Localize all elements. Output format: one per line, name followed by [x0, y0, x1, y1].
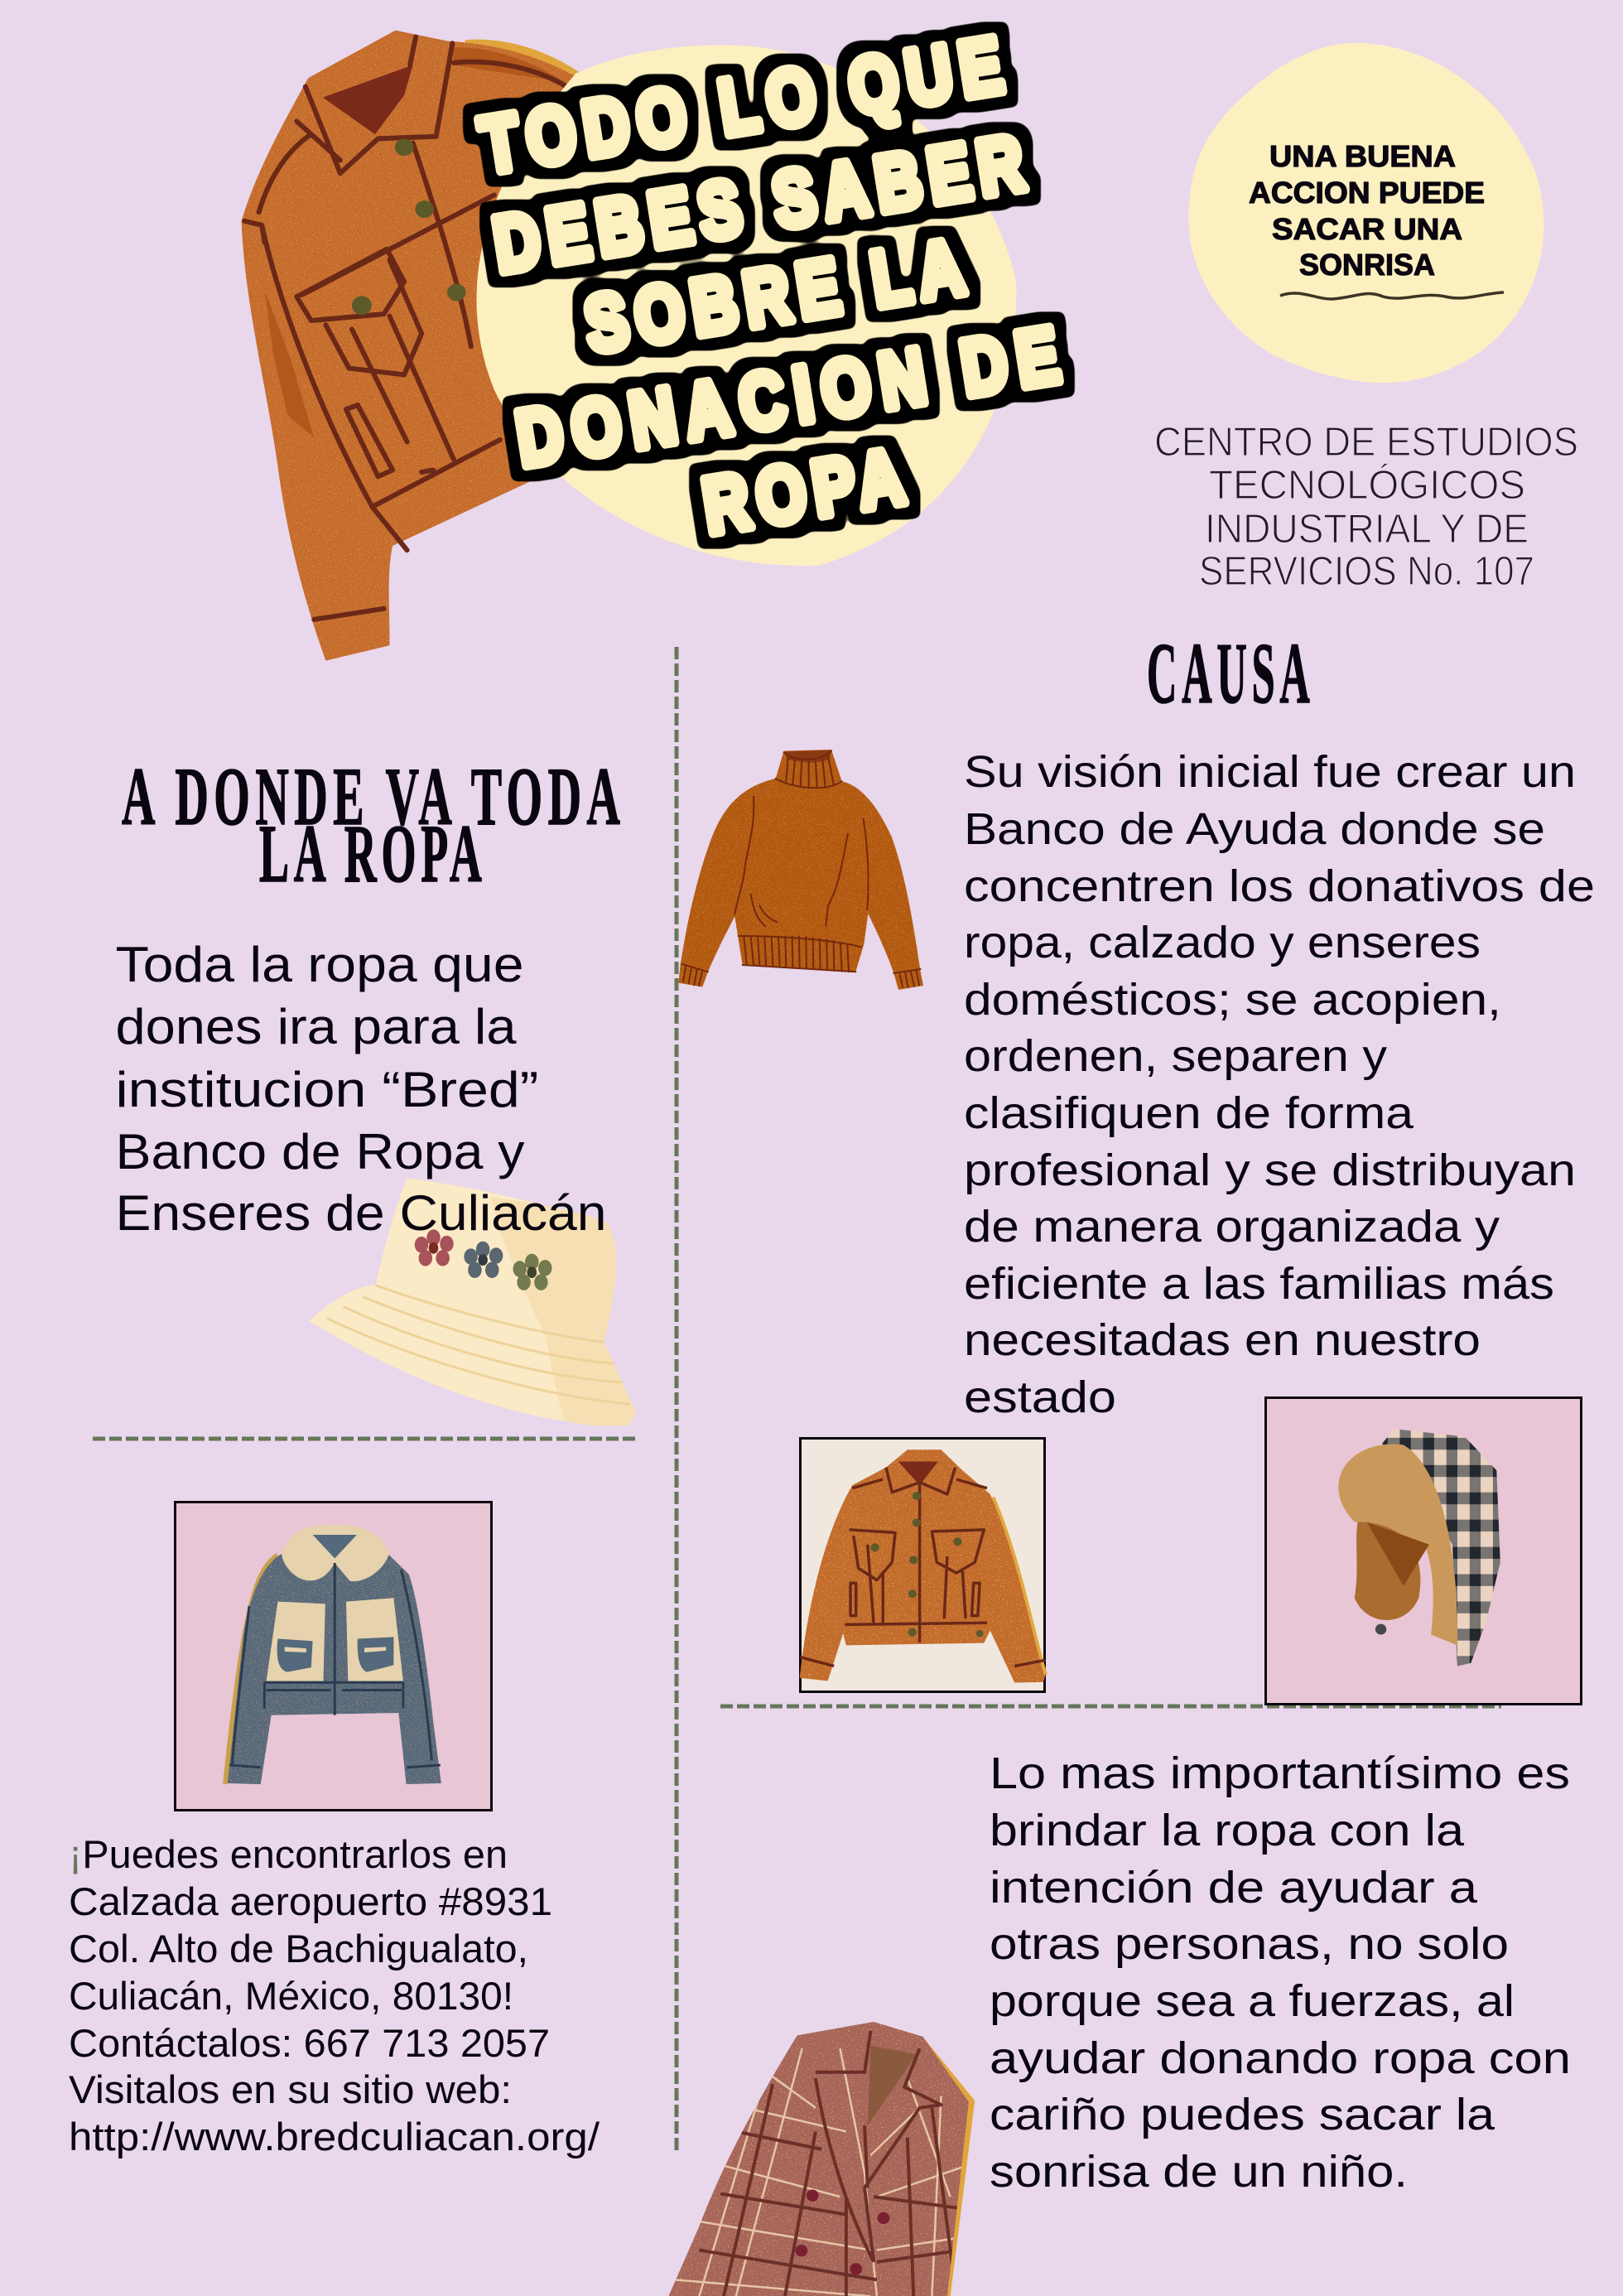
heading: a donde va toda la ropa [122, 750, 620, 900]
framed image: orange jacket [800, 1438, 1046, 1691]
text: causa body: de manera organizada y [964, 1202, 1500, 1252]
text: lo mas importante: otras personas, no solo [990, 1919, 1509, 1969]
text: causa body: necesitadas en nuestro [964, 1315, 1481, 1365]
school name: INDUSTRIAL Y DE [1205, 507, 1529, 552]
text: causa body [964, 747, 1595, 1422]
text: lo mas importante: Lo mas importantísimo es [990, 1749, 1570, 1798]
illustration: rust turtleneck sweater [678, 750, 923, 990]
title: DEBES SABER [488, 119, 1030, 289]
text: lo mas importante: ayudar donando ropa con [990, 2033, 1571, 2083]
title: ROPA [697, 432, 910, 551]
text: causa body: Su visión inicial fue crear un [964, 747, 1576, 797]
text: a donde va la ropa: institucion “Bred” [116, 1062, 538, 1117]
text: contact details: Visitalos en su sitio web: [69, 2067, 512, 2111]
text: a donde va la ropa: Banco de Ropa y [116, 1124, 525, 1179]
title [474, 21, 1065, 551]
text: contact details: Col. Alto de Bachigualato, [69, 1927, 528, 1970]
text: causa body: clasifiquen de forma [964, 1088, 1414, 1138]
school name: CENTRO DE ESTUDIOS [1154, 420, 1578, 465]
text: causa body: Banco de Ayuda donde se [964, 804, 1545, 854]
callout: cream blob with slogan [1188, 43, 1544, 383]
text: lo mas importante: intención de ayudar a [990, 1863, 1478, 1913]
school name: SERVICIOS No. 107 [1199, 549, 1534, 594]
slogan text: ACCION PUEDE [1249, 176, 1485, 210]
school name [1154, 420, 1578, 594]
text: lo mas importante: sonrisa de un niño. [990, 2147, 1408, 2197]
squiggle underline [1280, 292, 1504, 299]
title: DONACION DE [511, 311, 1065, 484]
text: contact details: Calzada aeropuerto #8931 [69, 1879, 552, 1923]
text: causa body: ropa, calzado y enseres [964, 918, 1481, 967]
illustration: cream bucket hat with flowers [309, 1178, 636, 1426]
text: contact details [69, 1832, 600, 2159]
text: causa body: domésticos; se acopien, [964, 975, 1501, 1025]
slogan text: SONRISA [1299, 248, 1435, 282]
illustration: plaid brown coat [668, 2022, 975, 2296]
text: lo mas importante [990, 1749, 1571, 2197]
text: lo mas importante: cariño puedes sacar la [990, 2090, 1495, 2139]
slogan text: SACAR UNA [1272, 212, 1462, 246]
title: TODO LO QUE [474, 21, 1009, 191]
text: causa body: ordenen, separen y [964, 1031, 1387, 1081]
text: a donde va la ropa: Enseres de Culiacán [116, 1185, 606, 1241]
text: contact details: http://www.bredculiacan.org/ [69, 2115, 600, 2159]
text: causa body: concentren los donativos de [964, 861, 1595, 911]
text: lo mas importante: porque sea a fuerzas, al [990, 1976, 1515, 2026]
text: causa body: eficiente a las familias más [964, 1259, 1554, 1309]
heading: a donde va toda la ropa: LA ROPA [259, 808, 482, 900]
text: contact details: ¡Puedes encontrarlos en [69, 1832, 508, 1876]
text: a donde va la ropa: Toda la ropa que [116, 937, 523, 992]
text: lo mas importante: brindar la ropa con la [990, 1806, 1465, 1855]
illustration: main orange denim jacket [242, 31, 599, 661]
title: SOBRE LA [579, 223, 970, 369]
text: a donde va la ropa: dones ira para la [116, 999, 517, 1054]
text: causa body: estado [964, 1372, 1116, 1422]
framed image: blue jacket with cream collar [176, 1503, 492, 1811]
text: a donde va la ropa [116, 937, 606, 1241]
heading: causa: CAUSA [1147, 625, 1310, 721]
slogan text [1249, 139, 1485, 282]
cream blob behind title [477, 46, 1016, 566]
heading: a donde va toda la ropa: A DONDE VA TODA [122, 750, 620, 842]
school name: TECNOLÓGICOS [1209, 463, 1525, 508]
framed image: trapper hat [1265, 1398, 1582, 1705]
text: causa body: profesional y se distribuyan [964, 1146, 1576, 1195]
text: contact details: Culiacán, México, 80130! [69, 1974, 513, 2018]
slogan text: UNA BUENA [1269, 139, 1456, 173]
text: contact details: Contáctalos: 667 713 2057 [69, 2021, 550, 2065]
